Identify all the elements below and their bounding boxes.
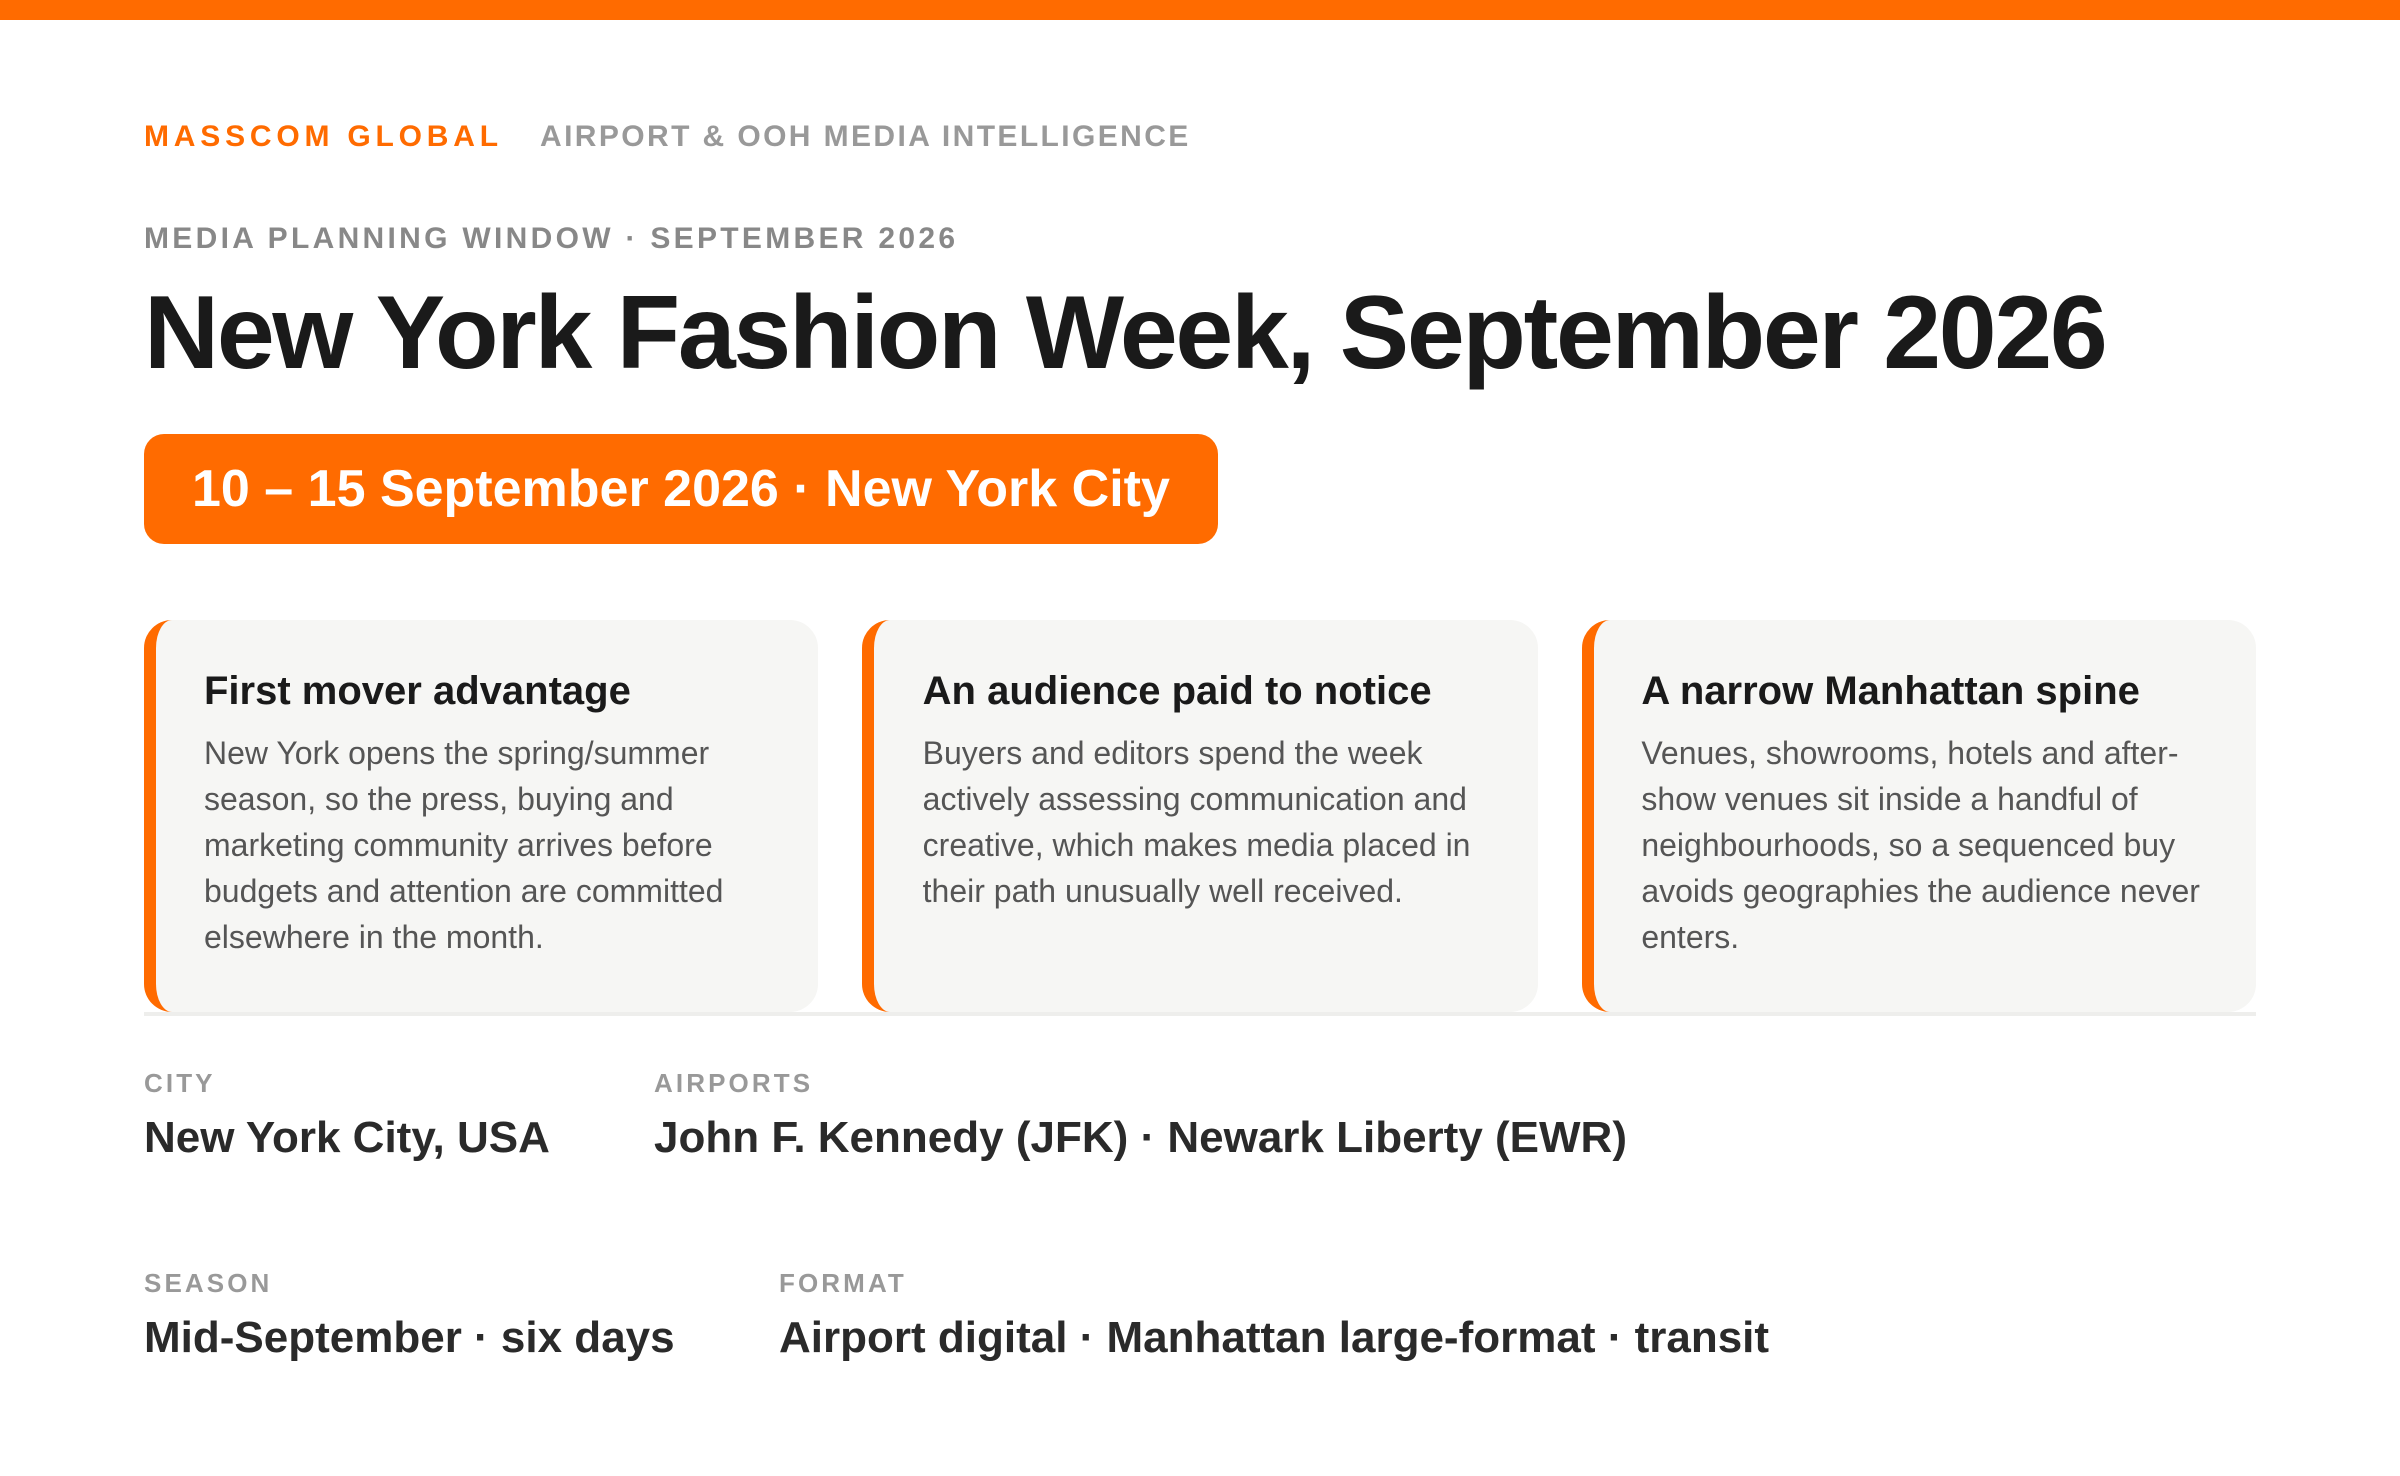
fact value: Airport digital · Manhattan large-format · transit [779,1313,1769,1362]
card body [923,735,1470,909]
fact label: AIRPORTS [654,1068,813,1098]
card body: season, so the press, buying and [204,781,674,817]
card body: show venues sit inside a handful of [1641,781,2138,817]
brand: Masscom Global: MASSCOM GLOBAL [144,120,503,153]
card heading: First mover advantage [204,669,631,713]
fact: city [144,1068,550,1162]
date pill [144,434,1218,544]
card body: Buyers and editors spend the week [923,735,1423,771]
fact: airports [654,1068,1627,1162]
card body: New York opens the spring/summer [204,735,709,771]
fact label: CITY [144,1068,216,1098]
card body: creative, which makes media placed in [923,827,1470,863]
card body: neighbourhoods, so a sequenced buy [1641,827,2175,863]
card body: Venues, showrooms, hotels and after- [1641,735,2179,771]
fact: season [144,1268,675,1362]
card body: avoids geographies the audience never [1641,873,2200,909]
fact label: SEASON [144,1268,272,1298]
top accent bar [0,0,2400,20]
panel: an audience paid to notice [862,620,1538,1012]
panel: a narrow Manhattan spine [1582,620,2256,1012]
fact value: John F. Kennedy (JFK) · Newark Liberty (EWR) [654,1113,1627,1162]
card body [204,735,723,955]
fact value: New York City, USA [144,1113,550,1162]
divider under cards [144,1012,2256,1016]
card body: enters. [1641,919,1739,955]
fact label: FORMAT [779,1268,907,1298]
fact: format [779,1268,1769,1362]
card heading: A narrow Manhattan spine [1641,669,2140,713]
eyebrow: MEDIA PLANNING WINDOW · SEPTEMBER 2026 [144,222,958,255]
card body: their path unusually well received. [923,873,1403,909]
card body [1641,735,2200,955]
card body: actively assessing communication and [923,781,1467,817]
date pill text: 10 – 15 September 2026 · New York City [192,460,1170,518]
card body: elsewhere in the month. [204,919,544,955]
card body: marketing community arrives before [204,827,713,863]
fact value: Mid-September · six days [144,1313,675,1362]
brand tagline: AIRPORT & OOH MEDIA INTELLIGENCE [540,120,1191,153]
title: New York Fashion Week, September 2026 [144,275,2105,391]
panel: first mover advantage [144,620,818,1012]
card body: budgets and attention are committed [204,873,723,909]
card heading: An audience paid to notice [923,669,1432,713]
